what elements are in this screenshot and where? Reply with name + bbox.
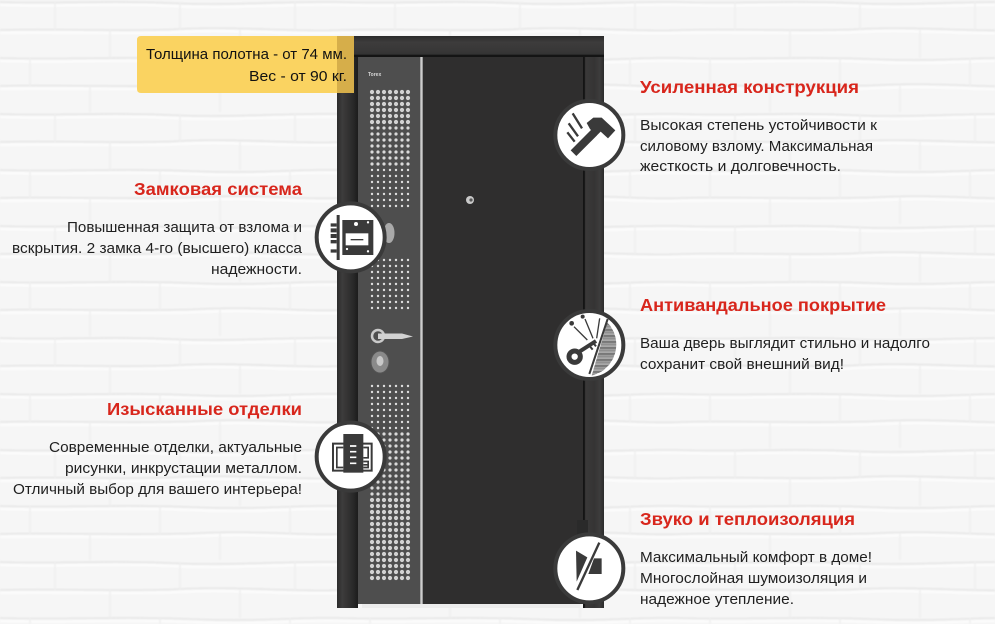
icon: lock mechanism [317, 203, 385, 271]
brand logo: Torex [368, 72, 381, 78]
description: sound and heat insulation: надежное утепление. [640, 591, 794, 608]
icon: door finishes [317, 423, 385, 491]
description: refined finishes: Современные отделки, актуальные [49, 439, 302, 456]
heading: anti-vandal coating: Антивандальное покрытие [640, 295, 886, 315]
description: lock system [12, 219, 303, 278]
icon: hammer [555, 101, 623, 169]
description: anti-vandal coating: Ваша дверь выглядит стильно и надолго [640, 335, 930, 352]
text block: reinforced construction [640, 77, 877, 175]
door [337, 36, 604, 608]
icon: muted sound [555, 534, 623, 602]
heading: lock system: Замковая система [134, 179, 302, 199]
dot pattern top [369, 89, 411, 209]
heading: sound and heat insulation: Звуко и теплоизоляция [640, 509, 855, 529]
dot pattern bottom [369, 383, 411, 581]
upper lock [384, 223, 394, 243]
text block: lock system [12, 179, 303, 278]
hinge [577, 520, 588, 535]
heading: reinforced construction: Усиленная конструкция [640, 77, 859, 97]
description: lock system: вскрытия. 2 замка 4-го (высшего) класса [12, 240, 303, 257]
decorative side panel [358, 57, 420, 604]
description: sound and heat insulation [640, 549, 872, 608]
callout: door thickness and weight [137, 36, 354, 93]
icon: key and scratched surface [555, 311, 623, 379]
description: refined finishes [13, 439, 302, 498]
callout: door thickness and weight: Толщина полотна - от 74 мм. [146, 46, 347, 63]
metal strip [420, 57, 423, 604]
door frame [337, 36, 604, 608]
callout: door thickness and weight: Вес - от 90 кг. [249, 68, 347, 85]
description: anti-vandal coating: сохранит свой внешний вид! [640, 356, 844, 373]
description: lock system: Повышенная защита от взлома и [67, 219, 302, 236]
text block: sound and heat insulation [640, 509, 872, 608]
peephole [466, 196, 474, 204]
door handle [372, 330, 413, 342]
description: reinforced construction: силовому взлому. Максимальная [640, 138, 873, 155]
text block: refined finishes [13, 399, 302, 498]
description: reinforced construction: жесткость и долговечность. [640, 158, 841, 175]
lower lock cylinder [371, 351, 389, 373]
description: reinforced construction [640, 117, 877, 175]
description: refined finishes: Отличный выбор для вашего интерьера! [13, 481, 302, 498]
text block: anti-vandal coating [640, 295, 930, 373]
description: refined finishes: рисунки, инкрустации металлом. [65, 460, 302, 477]
description: sound and heat insulation: Многослойная шумоизоляция и [640, 570, 867, 587]
dot pattern middle [369, 257, 411, 311]
description: sound and heat insulation: Максимальный комфорт в доме! [640, 549, 872, 566]
description: anti-vandal coating [640, 335, 930, 373]
heading: refined finishes: Изысканные отделки [107, 399, 302, 419]
door leaf [423, 57, 583, 604]
description: reinforced construction: Высокая степень устойчивости к [640, 117, 877, 134]
description: lock system: надежности. [211, 261, 302, 278]
